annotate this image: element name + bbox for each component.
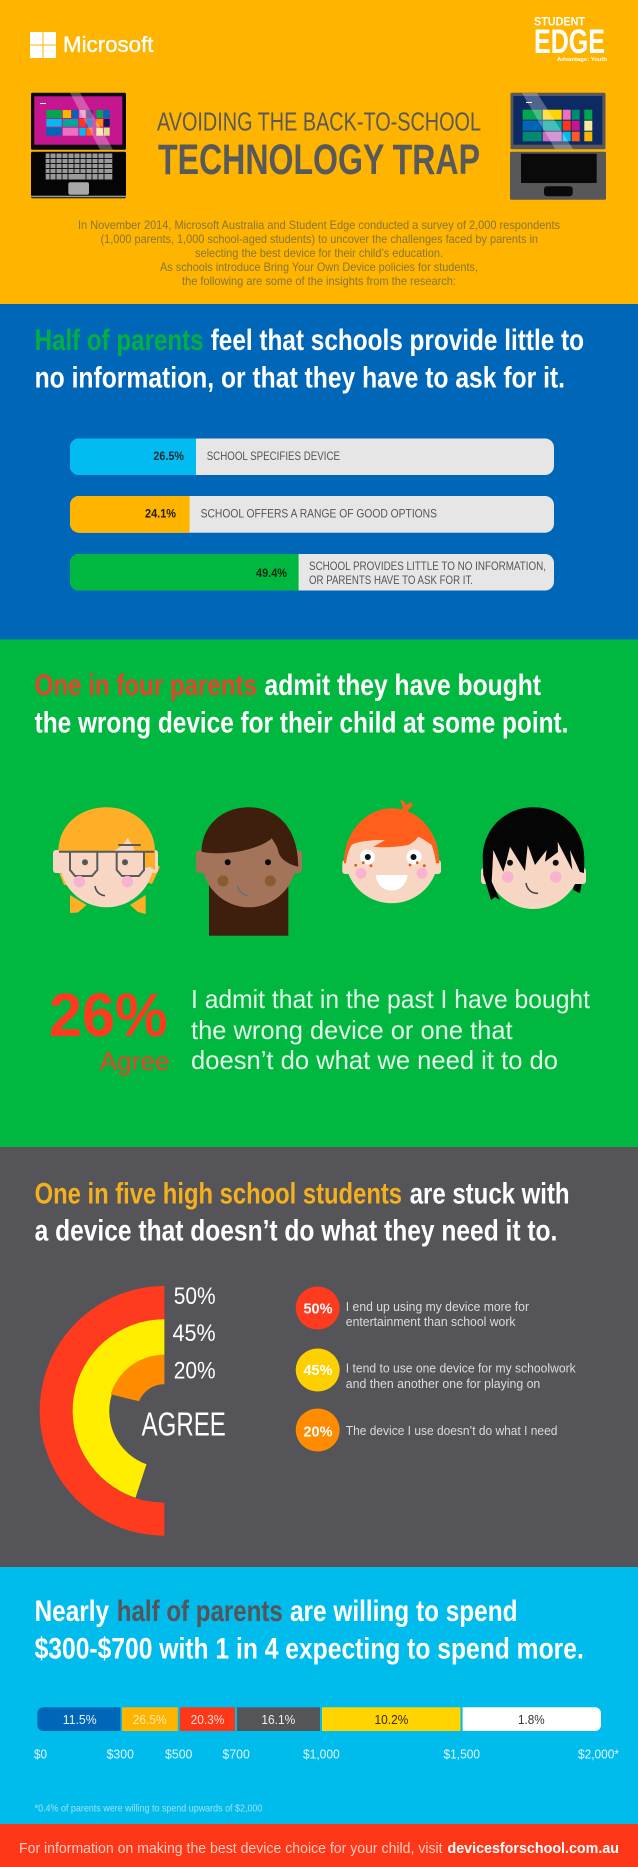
intro text: the following are some of the insights from the research: bbox=[182, 274, 456, 288]
heading: nearly half of parents: Nearly bbox=[35, 1595, 109, 1628]
legend: does not do what I need 20% bbox=[296, 1408, 557, 1452]
legend: two devices 45% bbox=[296, 1348, 576, 1392]
panel: footer: devicesforschool.com.au bbox=[448, 1840, 619, 1857]
icon: brown-haired child bbox=[196, 807, 302, 936]
heading: one in five students bbox=[35, 1177, 570, 1248]
intro text: selecting the best device for their child’s education. bbox=[195, 246, 443, 260]
chart: radial percentages: AGREE bbox=[142, 1406, 226, 1443]
panel: header bbox=[0, 0, 638, 304]
panel: wrong device bbox=[0, 640, 638, 1147]
legend: two devices 45%: 45% bbox=[304, 1362, 332, 1379]
legend: does not do what I need 20%: 20% bbox=[304, 1424, 332, 1441]
logo: Student Edge bbox=[534, 16, 607, 63]
axis labels: price scale bbox=[34, 1746, 619, 1761]
axis labels: price scale: $1,500 bbox=[444, 1746, 480, 1761]
bar: school specifies device: 26.5% bbox=[153, 449, 184, 463]
legend: two devices 45%: and then another one for playing on bbox=[346, 1376, 540, 1391]
bar: school specifies device bbox=[70, 438, 554, 475]
axis labels: price scale: $2,000* bbox=[578, 1746, 619, 1761]
chart: price segments: 16.1% bbox=[261, 1712, 296, 1727]
heading: one in four parents: admit they have bought bbox=[264, 669, 541, 702]
intro text: As schools introduce Bring Your Own Device policies for students, bbox=[160, 260, 478, 274]
heading: nearly half of parents bbox=[35, 1595, 584, 1665]
stat: 26% agree: Agree bbox=[100, 1046, 170, 1076]
legend: entertainment 50%: I end up using my device more for bbox=[346, 1299, 530, 1314]
chart: radial percentages: 50% bbox=[174, 1283, 216, 1310]
axis labels: price scale: $300 bbox=[107, 1746, 134, 1761]
logo: Student Edge: Advantage: Youth bbox=[557, 57, 607, 63]
logo: Microsoft: Microsoft bbox=[63, 32, 154, 57]
bar: school offers a range: 24.1% bbox=[145, 507, 176, 521]
heading: one in five students: are stuck with bbox=[410, 1177, 570, 1210]
heading: nearly half of parents: half of parents bbox=[117, 1595, 283, 1628]
footnote: *0.4% of parents were willing to spend upwards of $2,000 bbox=[35, 1804, 263, 1815]
glasses bbox=[59, 845, 154, 876]
intro text: (1,000 parents, 1,000 school-aged students) to uncover the challenges faced by parents in bbox=[100, 232, 538, 246]
chart: price segments bbox=[37, 1707, 601, 1731]
legend: two devices 45%: I tend to use one device for my schoolwork bbox=[346, 1361, 576, 1376]
panel: footer: For information on making the best device choice for your child, visit bbox=[19, 1840, 443, 1857]
logo: Microsoft bbox=[30, 32, 154, 58]
heading: half of parents: Half of parents bbox=[35, 324, 204, 357]
bar: school offers a range bbox=[70, 496, 554, 533]
intro text bbox=[78, 218, 560, 288]
panel: spending bbox=[0, 1567, 638, 1824]
logo: Student Edge: EDGE bbox=[534, 23, 605, 61]
icon: navy laptop bbox=[510, 93, 606, 200]
bar: little to no information bbox=[70, 554, 554, 590]
bar: little to no information: 49.4% bbox=[256, 566, 287, 580]
panel: stuck with a device bbox=[0, 1147, 638, 1567]
panel: school information bbox=[0, 304, 638, 640]
heading: one in five students: One in five high school students bbox=[35, 1177, 402, 1210]
panel: footer bbox=[0, 1824, 638, 1867]
stat: 26% agree: 26% bbox=[49, 981, 168, 1049]
icon: black-haired child bbox=[481, 807, 586, 909]
heading: nearly half of parents: are willing to spend bbox=[290, 1595, 518, 1628]
chart: price segments: 1.8% bbox=[518, 1712, 545, 1727]
bar: school specifies device: SCHOOL SPECIFIES DEVICE bbox=[207, 449, 340, 463]
axis labels: price scale: $1,000 bbox=[303, 1746, 340, 1761]
chart: radial percentages bbox=[40, 1283, 226, 1536]
icon: blonde child bbox=[53, 807, 160, 914]
legend: entertainment 50%: 50% bbox=[304, 1300, 332, 1317]
chart: price segments: 20.3% bbox=[191, 1712, 225, 1727]
logo: Student Edge: STUDENT bbox=[534, 16, 585, 28]
intro text: In November 2014, Microsoft Australia and Student Edge conducted a survey of 2,000 respondents bbox=[78, 218, 560, 232]
heading: one in four parents: One in four parents bbox=[35, 669, 257, 702]
legend: does not do what I need 20%: The device I use doesn’t do what I need bbox=[346, 1423, 557, 1438]
icon: ginger child bbox=[342, 800, 441, 903]
quote text: I admit that in the past I have bought bbox=[191, 984, 591, 1014]
chart: price segments: 26.5% bbox=[133, 1712, 167, 1727]
icon: magenta laptop bbox=[31, 93, 126, 198]
axis labels: price scale: $500 bbox=[165, 1746, 192, 1761]
title bbox=[157, 107, 481, 184]
heading: half of parents bbox=[35, 324, 584, 394]
axis labels: price scale: $700 bbox=[222, 1746, 250, 1761]
bar: little to no information: OR PARENTS HAVE TO ASK FOR IT. bbox=[309, 573, 473, 587]
title: TECHNOLOGY TRAP bbox=[158, 136, 480, 184]
title: AVOIDING THE BACK-TO-SCHOOL bbox=[157, 107, 481, 137]
quote text: doesn’t do what we need it to do bbox=[191, 1045, 558, 1075]
legend: entertainment 50%: entertainment than school work bbox=[346, 1314, 516, 1329]
chart: radial percentages: 45% bbox=[172, 1320, 216, 1347]
chart: price segments: 11.5% bbox=[63, 1712, 97, 1727]
quote text: the wrong device or one that bbox=[191, 1015, 513, 1045]
chart: radial percentages: 20% bbox=[174, 1357, 216, 1384]
quote text bbox=[191, 984, 591, 1075]
chart: price segments: 10.2% bbox=[374, 1712, 409, 1727]
bar: school offers a range: SCHOOL OFFERS A RANGE OF GOOD OPTIONS bbox=[201, 507, 437, 521]
legend: entertainment 50% bbox=[296, 1286, 530, 1330]
bar: little to no information: SCHOOL PROVIDES LITTLE TO NO INFORMATION, bbox=[309, 559, 546, 573]
heading: one in four parents bbox=[35, 669, 568, 739]
axis labels: price scale: $0 bbox=[34, 1746, 47, 1761]
